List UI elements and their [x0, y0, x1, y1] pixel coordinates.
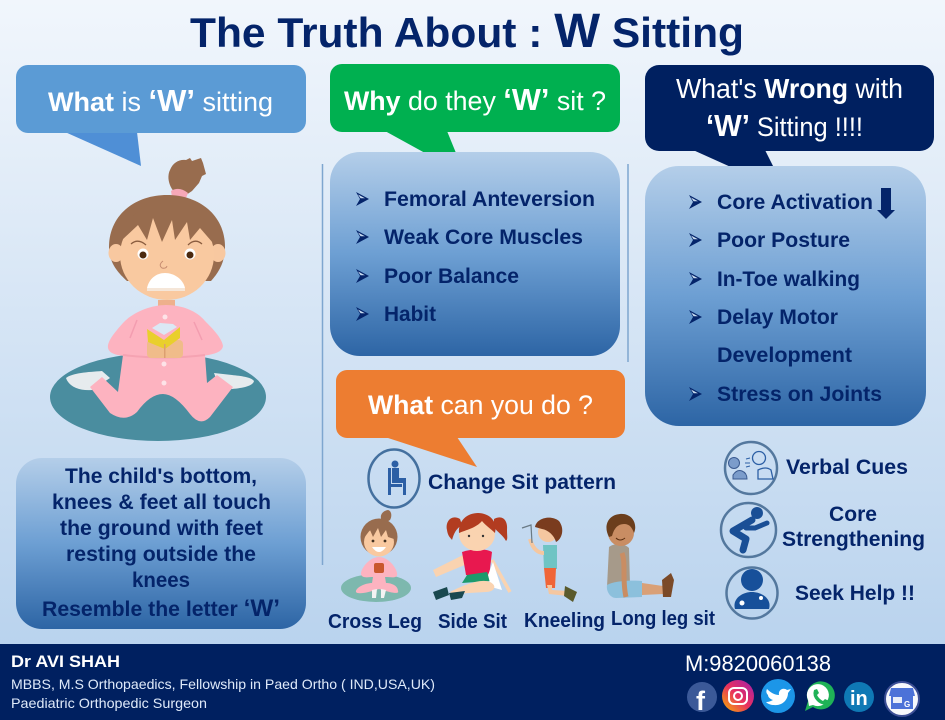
panel: what's wrong list: Stress on Joints — [717, 383, 882, 406]
label: core strengthening — [782, 503, 925, 551]
panel: definition: resting outside the — [66, 543, 256, 566]
illustration: kneeling child — [522, 518, 577, 602]
labels: sitting alternatives: Kneeling — [524, 610, 605, 632]
panel: definition: knees & feet all touch — [52, 491, 271, 514]
icon: facebook: f — [696, 686, 706, 716]
label: seek help: Seek Help !! — [795, 582, 915, 605]
illustration: cross leg child — [341, 510, 411, 602]
panel: why causes: Poor Balance — [384, 265, 519, 288]
socks — [66, 371, 110, 390]
panel: what's wrong list: Delay Motor — [717, 306, 838, 329]
icon: change sit pattern — [368, 450, 420, 508]
panel: what's wrong list: Poor Posture — [717, 229, 850, 252]
callout: why do they W sit: Why do they ‘W’ sit ? — [344, 82, 606, 117]
panel: why causes: Habit — [384, 303, 436, 326]
callout: what can you do — [336, 370, 625, 467]
labels: sitting alternatives: Side Sit — [438, 611, 507, 633]
icon: core strengthening — [721, 503, 776, 557]
icon: doctor — [726, 568, 778, 618]
callout: why do they W sit — [330, 64, 620, 153]
callout: what can you do: What can you do ? — [368, 390, 593, 420]
panel: definition: Resemble the letter ‘W’ — [42, 595, 280, 622]
icon: google my business — [885, 682, 919, 716]
icon: linkedin: in — [850, 688, 868, 710]
callout: what is W sitting: What is ‘W’ sitting — [48, 83, 273, 118]
panel: definition: the ground with feet — [60, 517, 263, 540]
callout: what is W sitting — [16, 65, 306, 166]
arrow: down — [877, 188, 895, 219]
illustration: side sit child — [433, 513, 510, 600]
hair bun — [168, 158, 206, 195]
label: change sit pattern: Change Sit pattern — [428, 471, 616, 494]
panel: what's wrong list: In-Toe walking — [717, 268, 860, 291]
panel: why causes — [330, 152, 620, 356]
icon: verbal cues — [725, 442, 777, 494]
panel: what's wrong list: Development — [717, 344, 852, 367]
icon: instagram — [722, 680, 754, 712]
hands and book — [147, 340, 183, 358]
icon: facebook — [687, 682, 717, 716]
pink body — [90, 355, 233, 421]
label: verbal cues: Verbal Cues — [786, 456, 908, 479]
illustration: child W sitting — [50, 158, 266, 441]
labels: sitting alternatives: Long leg sit — [611, 608, 715, 630]
panel: definition — [16, 458, 306, 629]
callout: what's wrong with W sitting — [645, 65, 934, 168]
panel: why causes: Femoral Anteversion — [384, 188, 595, 211]
label: core strengthening: Core — [829, 503, 877, 526]
panel: what's wrong list — [645, 166, 926, 426]
callout: what's wrong with W sitting: ‘W’ Sitting !!!! — [706, 108, 863, 143]
icon: linkedin — [844, 682, 874, 712]
label: core strengthening: Strengthening — [782, 528, 925, 551]
footer bar: MBBS, M.S Orthopaedics, Fellowship in Paed Ortho ( IND,USA,UK) — [11, 676, 435, 692]
title: The Truth About : W Sitting — [190, 5, 744, 58]
icon: whatsapp — [805, 681, 835, 711]
panel: definition: knees — [132, 569, 190, 592]
panel: why causes: Weak Core Muscles — [384, 226, 583, 249]
footer bar: Dr AVI SHAH — [11, 652, 120, 671]
footer bar: M:9820060138 — [685, 651, 831, 676]
panel: definition: The child's bottom, — [65, 465, 257, 488]
head and hair — [109, 195, 225, 281]
labels: sitting alternatives: Cross Leg — [328, 611, 422, 633]
labels: sitting alternatives — [328, 608, 715, 633]
callout: what's wrong with W sitting: What's Wrong with — [676, 73, 903, 104]
footer bar — [0, 644, 945, 720]
icon: google my business: G — [904, 700, 910, 709]
panel: what's wrong list: Core Activation — [717, 191, 873, 214]
footer bar: Paediatric Orthopedic Surgeon — [11, 695, 207, 711]
illustration: long leg sit child — [606, 514, 674, 598]
icon: twitter — [761, 679, 795, 713]
face details — [138, 248, 148, 260]
